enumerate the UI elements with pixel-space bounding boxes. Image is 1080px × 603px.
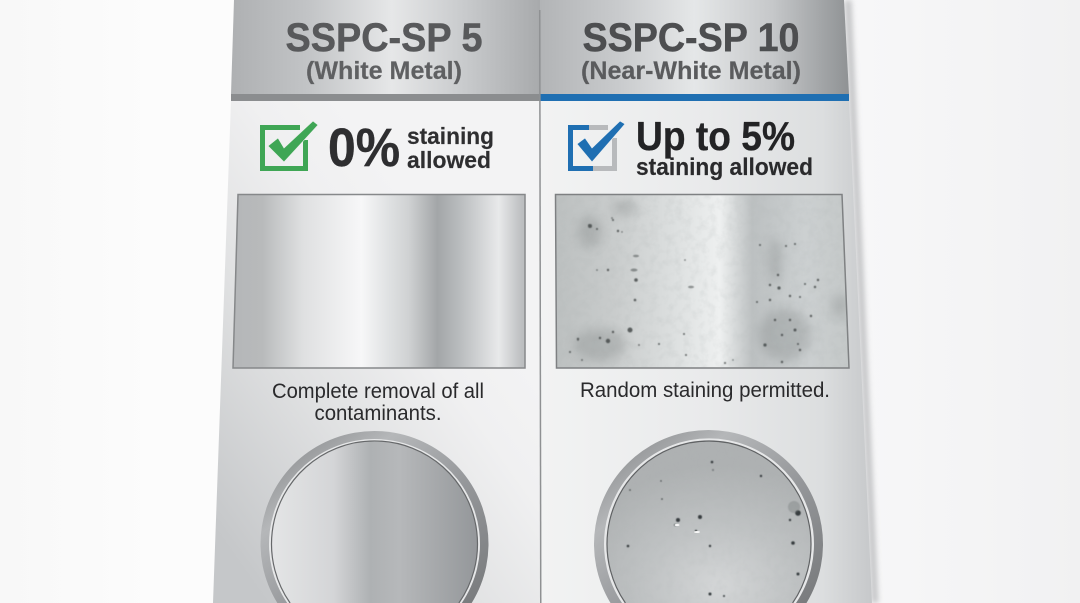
panel: SSPC-SP 5 — [213, 0, 541, 603]
header rule — [231, 94, 540, 101]
subheading: White Metal: (White Metal) — [306, 57, 462, 85]
caption: complete removal: contaminants. — [314, 402, 442, 425]
panel body — [213, 101, 541, 603]
board shadow — [845, 0, 878, 603]
caption: random staining: Random staining permitted. — [580, 379, 830, 402]
header rule — [540, 94, 849, 101]
heading: SSPC-SP 5: SSPC-SP 5 — [286, 16, 482, 60]
label: staining allowed: staining — [407, 123, 494, 149]
icon: blue check box — [570, 121, 625, 168]
label: staining allowed: staining allowed — [636, 154, 813, 181]
stat: Up to 5%: Up to 5% — [636, 113, 795, 159]
caption: complete removal: Complete removal of all — [272, 380, 484, 403]
heading: SSPC-SP 10: SSPC-SP 10 — [582, 16, 800, 60]
panel: SSPC-SP 10 — [540, 0, 872, 603]
header band — [540, 0, 849, 94]
subheading: Near-White Metal: (Near-White Metal) — [581, 57, 801, 85]
centre divider — [539, 10, 542, 603]
header band — [231, 0, 540, 94]
photo: near-white metal surface — [556, 194, 849, 368]
caption: complete removal — [272, 380, 484, 425]
stat: 0%: 0% — [328, 118, 400, 178]
circular sample: near-white metal — [594, 430, 823, 603]
circular sample: white metal — [260, 431, 488, 603]
label: staining allowed — [407, 123, 494, 173]
icon: green check box — [262, 121, 318, 168]
photo: white metal surface — [233, 194, 525, 368]
label: staining allowed: allowed — [407, 147, 491, 173]
panel body — [541, 101, 872, 603]
